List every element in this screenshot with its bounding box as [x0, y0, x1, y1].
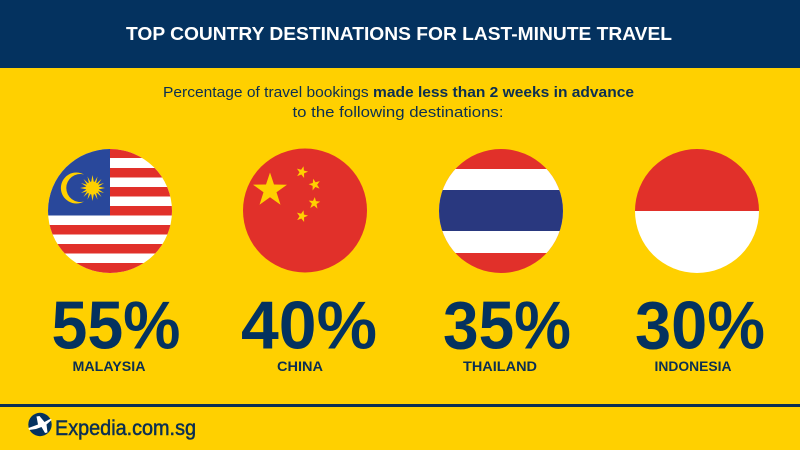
subtitle: to the following destinations: — [292, 104, 504, 121]
stat: Indonesia: 30% — [635, 288, 765, 364]
label: China: CHINA — [277, 358, 323, 374]
icon: small stars — [295, 165, 322, 223]
label: Thailand: THAILAND — [463, 358, 537, 374]
flag: Thailand — [439, 149, 563, 273]
subtitle: Percentage of travel bookings made less than 2 weeks in advance — [163, 84, 634, 101]
icon: sun — [80, 175, 105, 201]
flag: Malaysia — [48, 149, 172, 273]
logo: Expedia.com.sg — [28, 413, 196, 440]
header banner — [0, 0, 800, 68]
icon: crescent — [61, 173, 84, 204]
label: Indonesia: INDONESIA — [654, 358, 732, 374]
stat: Thailand: 35% — [443, 288, 571, 364]
subtitle — [163, 84, 634, 121]
flag: Indonesia — [635, 149, 759, 273]
wordmark: Expedia.com.sg — [55, 416, 196, 440]
footer rule — [0, 404, 800, 407]
icon: large star — [253, 172, 287, 205]
label: Malaysia: MALAYSIA — [72, 358, 146, 374]
icon: plane globe — [28, 413, 52, 436]
title: TOP COUNTRY DESTINATIONS FOR LAST-MINUTE TRAVEL — [126, 23, 672, 44]
stat: China: 40% — [241, 288, 377, 364]
flag: China — [243, 148, 367, 272]
stat: Malaysia: 55% — [52, 288, 180, 364]
